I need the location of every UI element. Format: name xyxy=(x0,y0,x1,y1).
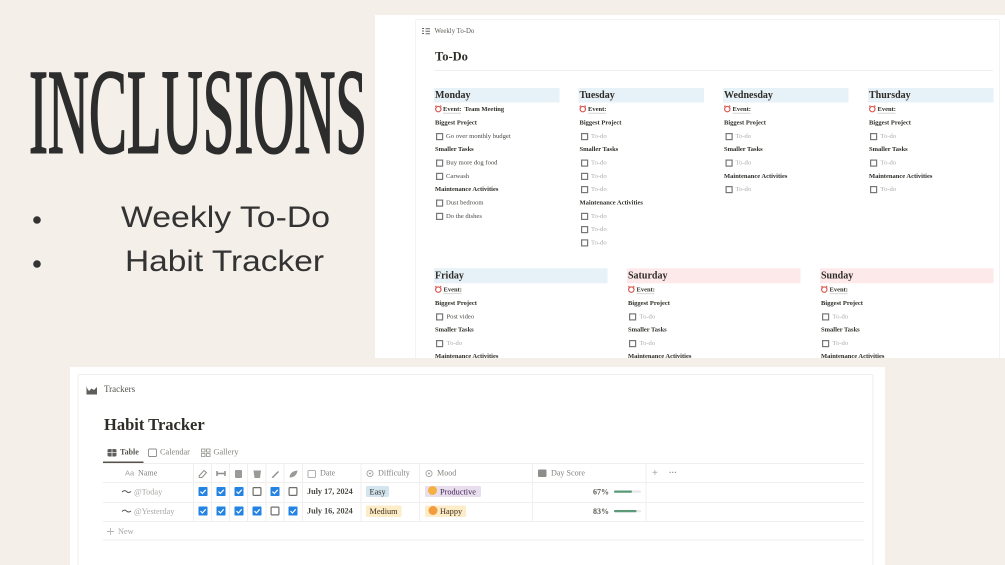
panel: Wednesday: Biggest Project xyxy=(724,120,767,126)
tag: easy xyxy=(366,486,389,497)
panel: Tuesday: To-do xyxy=(591,160,607,166)
panel: Sunday: Sunday xyxy=(821,270,853,282)
panel: Monday: Go over monthly budget xyxy=(446,133,511,140)
panel: Friday: Biggest Project xyxy=(435,300,478,307)
panel: Monday: Monday xyxy=(435,90,471,101)
panel: Friday: Maintenance Activities xyxy=(435,353,499,360)
icon: checklist xyxy=(422,28,430,34)
panel: Friday: Smaller Tasks xyxy=(435,326,474,334)
panel: Wednesday: To-do xyxy=(736,133,752,140)
bullet: habit tracker: Habit Tracker xyxy=(125,245,324,278)
tag: productive xyxy=(425,486,481,497)
tag: happy xyxy=(425,506,466,517)
heading: To-Do: To-Do xyxy=(435,50,468,64)
panel: Monday: Smaller Tasks xyxy=(435,146,474,153)
breadcrumb: Trackers xyxy=(104,384,136,394)
panel: Friday: Event: xyxy=(444,286,462,294)
panel: Monday xyxy=(434,88,560,220)
panel: Tuesday xyxy=(578,88,704,246)
panel: Monday: Biggest Project xyxy=(435,120,478,126)
panel: Tuesday: To-do xyxy=(591,226,607,233)
panel: Thursday: To-do xyxy=(880,186,897,193)
panel: habit tracker screenshot xyxy=(70,367,885,565)
panel: Sunday xyxy=(820,268,994,360)
panel: Saturday xyxy=(627,268,800,360)
panel: Friday: Friday xyxy=(435,270,464,282)
table header: Date xyxy=(320,468,336,478)
table row: today: July 17, 2024 xyxy=(307,487,353,496)
new row button xyxy=(107,527,134,536)
table header: Day Score xyxy=(551,468,585,478)
panel: Thursday: Maintenance Activities xyxy=(869,173,933,180)
panel: Friday xyxy=(434,268,608,360)
panel: Saturday: Saturday xyxy=(628,270,667,282)
panel: Saturday: Maintenance Activities xyxy=(628,353,692,360)
icon: chart xyxy=(86,386,97,394)
table header: Difficulty xyxy=(378,468,411,478)
panel: weekly to-do screenshot xyxy=(375,15,1005,364)
panel: Monday: Carwash xyxy=(446,173,470,180)
breadcrumb: Weekly To-Do xyxy=(434,28,475,35)
table row: yesterday: @Yesterday xyxy=(134,507,175,516)
panel: Tuesday: To-do xyxy=(591,239,607,246)
panel: Saturday: To-do xyxy=(640,340,656,347)
tag: productive: Productive xyxy=(440,488,476,496)
panel: Wednesday: Wednesday xyxy=(724,90,773,101)
panel: Monday: Event: xyxy=(443,106,461,113)
panel: Monday: Do the dishes xyxy=(446,213,482,220)
day score: 83%: 83% xyxy=(593,507,609,516)
panel: Sunday: Smaller Tasks xyxy=(821,326,860,334)
panel: Wednesday: Maintenance Activities xyxy=(724,173,788,180)
panel: Friday: To-do xyxy=(446,340,463,347)
table row: today: @Today xyxy=(134,488,163,496)
panel: Wednesday: To-do xyxy=(736,160,752,166)
panel: Monday: Maintenance Activities xyxy=(435,186,499,193)
panel: Tuesday: Smaller Tasks xyxy=(580,146,619,153)
panel: Saturday: Event: xyxy=(636,286,655,294)
table header: Mood xyxy=(437,468,456,478)
table header: Name xyxy=(138,468,158,478)
tabs: Calendar xyxy=(160,448,190,456)
table grid xyxy=(103,463,864,540)
panel: Wednesday: To-do xyxy=(736,186,752,193)
table header: Aa xyxy=(125,468,135,478)
table header: ··· xyxy=(669,468,677,477)
panel: Tuesday: To-do xyxy=(591,213,607,220)
table row: today xyxy=(122,486,641,497)
panel: Thursday: Thursday xyxy=(869,90,911,101)
panel: Thursday: To-do xyxy=(880,160,897,166)
table row: yesterday: July 16, 2024 xyxy=(307,506,353,516)
panel: Saturday: To-do xyxy=(640,313,656,320)
panel: Tuesday: Tuesday xyxy=(580,90,615,101)
day score: 67% xyxy=(593,488,641,496)
panel: Thursday: Biggest Project xyxy=(869,120,912,126)
panel: Friday: Post video xyxy=(446,313,475,320)
day score: 83% xyxy=(593,507,641,516)
panel: Sunday: To-do xyxy=(832,313,849,320)
panel: Thursday: Smaller Tasks xyxy=(869,146,908,153)
tag: medium: Medium xyxy=(370,507,398,516)
bullet: weekly to-do xyxy=(33,201,330,234)
panel: Tuesday: To-do xyxy=(591,133,607,140)
tabs: Table xyxy=(120,448,139,456)
panel: Thursday xyxy=(868,88,994,193)
panel: Tuesday: To-do xyxy=(591,173,607,180)
heading: Habit Tracker: Habit Tracker xyxy=(104,415,205,434)
bullet: habit tracker xyxy=(33,245,324,278)
tag: easy: Easy xyxy=(370,488,386,496)
bullet list xyxy=(33,201,330,278)
panel: Tuesday: Event: xyxy=(588,106,606,113)
panel: Tuesday: To-do xyxy=(591,186,607,193)
panel: Sunday: Maintenance Activities xyxy=(821,353,885,360)
panel: Wednesday: Smaller Tasks xyxy=(724,146,763,153)
panel: Thursday: To-do xyxy=(880,133,897,140)
table row: yesterday xyxy=(122,506,641,517)
panel: Sunday: Event: xyxy=(830,286,848,294)
panel: Sunday: Biggest Project xyxy=(821,300,864,307)
tabs: Gallery xyxy=(214,448,239,456)
tabs xyxy=(103,448,239,463)
panel: Wednesday xyxy=(723,88,848,193)
panel: Monday: Buy more dog food xyxy=(446,160,498,166)
table header: + xyxy=(652,468,658,479)
text: INCLUSIONS xyxy=(29,46,367,180)
panel: Tuesday: Biggest Project xyxy=(580,120,622,126)
panel: Monday: Team Meeting xyxy=(464,106,505,113)
table header xyxy=(125,468,677,479)
panel: Thursday: Event: xyxy=(878,106,896,113)
panel: Saturday: Biggest Project xyxy=(628,300,671,307)
panel: Sunday: To-do xyxy=(832,340,849,347)
panel: Wednesday: Event: xyxy=(732,106,751,113)
new row button: New xyxy=(118,527,134,536)
panel: Tuesday: Maintenance Activities xyxy=(580,200,643,206)
bullet: weekly to-do: Weekly To-Do xyxy=(121,201,330,234)
panel: Monday: Dust bedroom xyxy=(446,200,484,206)
panel: Saturday: Smaller Tasks xyxy=(628,326,667,334)
tag: happy: Happy xyxy=(440,507,463,516)
day score: 67%: 67% xyxy=(593,488,609,496)
tag: medium xyxy=(366,506,402,517)
